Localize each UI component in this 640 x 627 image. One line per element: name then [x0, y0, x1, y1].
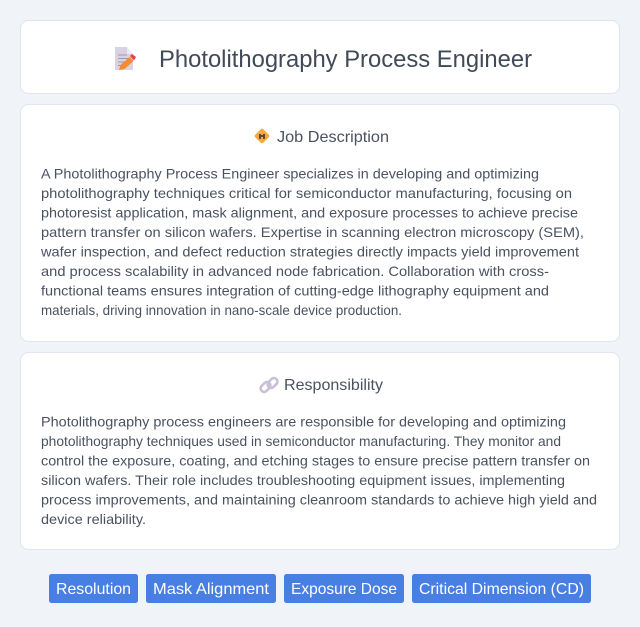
icon: diamond sign: [254, 128, 270, 144]
panel: title: [20, 20, 620, 94]
text block: job description: photoresist application, mask alignment, and exposure processes to achieve precise: [41, 204, 578, 220]
panel: responsibility: [20, 352, 620, 550]
text block: job description: functional teams ensures integration of cutting-edge lithography equipment and: [41, 282, 549, 298]
tag: resolution: Resolution: [56, 581, 131, 598]
text block: responsibility: Photolithography process engineers are responsible for developing and optimizing: [41, 414, 566, 430]
text block: job description: A Photolithography Process Engineer specializes in developing and optimizing: [41, 166, 539, 182]
text block: job description: wafer inspection, and defect reduction strategies directly impacts yield improvement: [40, 244, 579, 260]
heading: responsibility: Responsibility: [284, 377, 383, 394]
tag: exposure dose: [284, 574, 404, 603]
tag: resolution: [49, 574, 138, 603]
icon: document with pencil: [115, 47, 136, 70]
text block: responsibility: control the exposure, coating, and etching stages to ensure precise pattern transfer on: [41, 452, 590, 468]
tag: critical dimension: Critical Dimension (CD): [419, 581, 584, 598]
heading: job description: Job Description: [277, 129, 389, 146]
tag: critical dimension: [412, 574, 591, 603]
text block: responsibility: [41, 414, 597, 527]
text block: job description: materials, driving innovation in nano-scale device production.: [41, 302, 402, 318]
text block: responsibility: silicon wafers. Their role includes troubleshooting equipment issues, implementing: [41, 472, 565, 488]
tag: mask alignment: [146, 574, 276, 603]
tag row: [49, 574, 591, 603]
icon: chain link: [259, 377, 279, 393]
text block: responsibility: device reliability.: [41, 511, 146, 527]
text block: responsibility: photolithography techniques used in semiconductor manufacturing. They monitor and: [41, 433, 561, 449]
title text: Photolithography Process Engineer: [159, 46, 532, 73]
text block: job description: photolithography techniques critical for semiconductor manufacturing, focusing on: [41, 185, 572, 201]
text block: job description: and process scalability in advanced node fabrication. Collaboration with cross-: [41, 263, 549, 279]
text block: job description: [40, 166, 584, 318]
text block: job description: pattern transfer on silicon wafers. Expertise in scanning electron microscopy (SEM),: [41, 224, 584, 240]
tag: exposure dose: Exposure Dose: [291, 581, 397, 598]
tag: mask alignment: Mask Alignment: [153, 581, 270, 598]
text block: responsibility: process improvements, and maintaining cleanroom standards to achieve high yield and: [41, 492, 597, 508]
panel: job description: [20, 104, 620, 342]
